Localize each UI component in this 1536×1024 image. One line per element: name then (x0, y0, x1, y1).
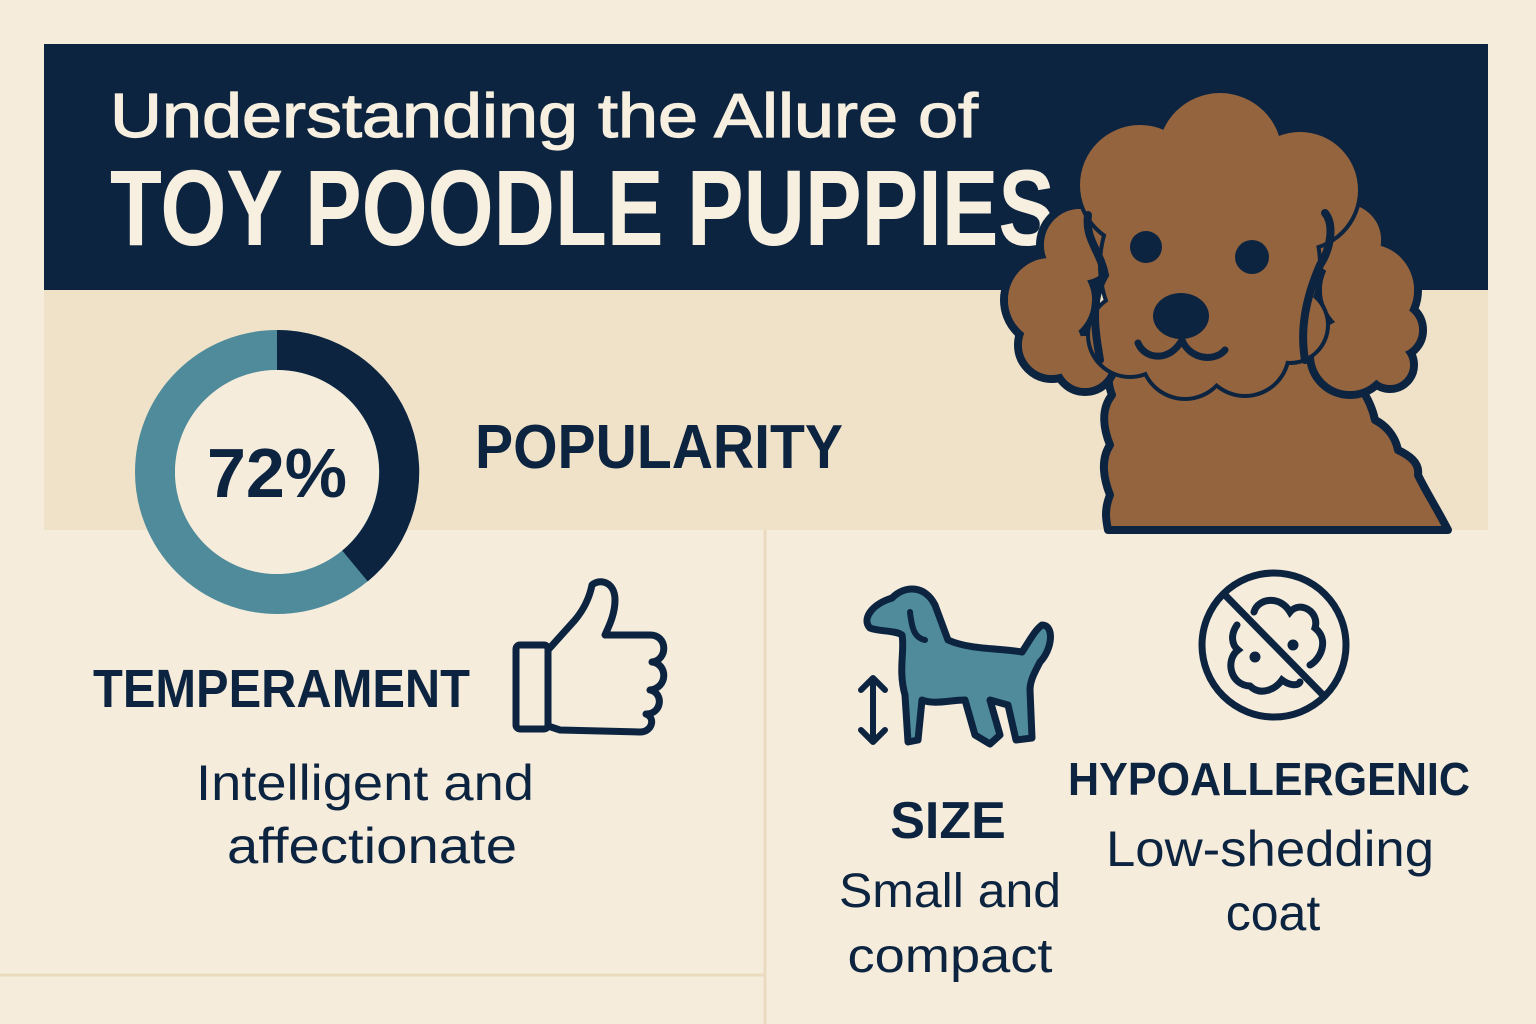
title banner (44, 44, 1488, 290)
heading: popularity: POPULARITY (475, 413, 843, 482)
text: temperament description: Intelligent and (196, 755, 534, 811)
text: temperament description (196, 755, 534, 874)
icon: thumbs up (516, 582, 664, 732)
text: hypoallergenic: HYPOALLERGENIC (1068, 753, 1470, 805)
text: hypoallergenic: coat (1226, 885, 1320, 941)
donut chart: 72%: 72% (207, 434, 347, 512)
text: hypoallergenic: Low-shedding (1106, 821, 1434, 877)
beige band (44, 290, 1488, 530)
title line 2: TOY POODLE PUPPIES (110, 147, 1055, 268)
donut chart: 72% (155, 350, 399, 594)
icon: no allergens (1202, 573, 1346, 717)
illustration: poodle (1004, 89, 1448, 530)
title line 1: Understanding the Allure of (110, 82, 979, 151)
text: size: Small and (839, 865, 1061, 918)
heading: temperament: TEMPERAMENT (93, 659, 470, 719)
text: size: compact (848, 930, 1052, 983)
text: temperament description: affectionate (227, 818, 517, 874)
icon: size dog (861, 589, 1050, 744)
text: size: SIZE (890, 792, 1006, 850)
text: size (839, 792, 1061, 983)
text: hypoallergenic (1068, 753, 1470, 941)
